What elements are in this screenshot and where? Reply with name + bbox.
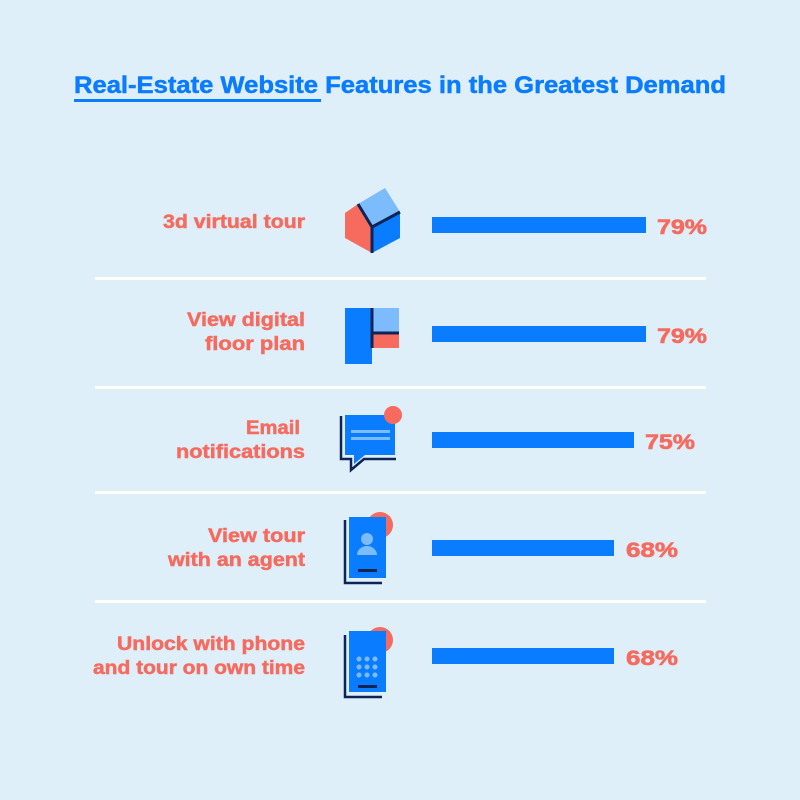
label: view tour with an agent: with an agent — [167, 550, 306, 571]
value: 79%: 79% — [657, 325, 707, 348]
bar: 79% — [432, 217, 646, 233]
value: 75%: 75% — [645, 431, 695, 454]
bar: 68% — [432, 648, 614, 664]
title: Real-Estate Website Features in the Greatest Demand — [74, 72, 726, 99]
label: 3d virtual tour: 3d virtual tour — [163, 212, 306, 233]
value: 79%: 79% — [657, 216, 707, 239]
label: view digital floor plan: View digital — [187, 310, 305, 331]
bar: 68% — [432, 540, 614, 556]
bar: 79% — [432, 326, 646, 342]
label: email notifications: notifications — [176, 442, 305, 463]
row: phone unlock — [93, 627, 678, 697]
icon: phone keypad — [345, 627, 393, 697]
label: unlock with phone: and tour on own time — [93, 658, 305, 679]
icon: agent card — [345, 512, 393, 583]
label: view tour with an agent: View tour — [208, 526, 306, 547]
row: floor plan — [187, 308, 707, 364]
row: agent — [167, 512, 678, 583]
label: view digital floor plan: floor plan — [205, 334, 305, 355]
label: email notifications: Email — [246, 418, 300, 439]
label: unlock with phone: Unlock with phone — [117, 634, 305, 655]
icon: house — [345, 188, 400, 253]
icon: chat bubble — [341, 406, 402, 470]
icon: floor plan — [345, 308, 399, 364]
row: 3d virtual tour — [163, 188, 707, 253]
row: email — [176, 406, 695, 470]
bar: 75% — [432, 432, 634, 448]
value: 68%: 68% — [626, 647, 678, 670]
value: 68%: 68% — [626, 539, 678, 562]
